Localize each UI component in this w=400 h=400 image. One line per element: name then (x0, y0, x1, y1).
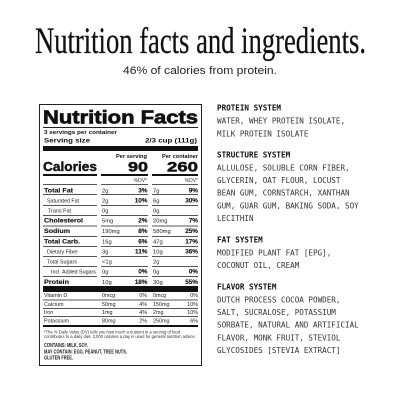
panel: nutrition facts label: %DV* (134, 178, 147, 184)
nutrient rows: 30g (153, 280, 163, 286)
nutrient rows: Total Fat (44, 188, 74, 194)
nutrient rows: 16g (102, 240, 112, 246)
nutrient rows: 7% (189, 218, 198, 224)
text block: flavor system: SALT, SUCRALOSE, POTASSIUM (217, 308, 336, 317)
text block: protein system: PROTEIN SYSTEM (217, 104, 281, 112)
nutrient rows: 6% (138, 238, 148, 246)
text block: structure system: GUM, GUAR GUM, BAKING SODA, SOY (217, 202, 359, 210)
nutrient rows: 20mg (153, 218, 168, 224)
vitamins and minerals: Calcium (44, 302, 64, 308)
vitamins and minerals: 2mg (153, 310, 164, 316)
footnote: contributes to a daily diet. 2,000 calories a day is used for general nutrition advice. (44, 334, 196, 339)
nutrient rows: Trans Fat (48, 208, 71, 214)
vitamins and minerals: 0mcg (153, 293, 166, 299)
text block: fat system: COCONUT OIL, CREAM (217, 261, 300, 270)
calories row: Calories (43, 160, 97, 174)
panel: nutrition facts label: %DV* (185, 178, 198, 184)
nutrient rows: 0% (189, 268, 198, 276)
vitamins and minerals: 4% (139, 310, 147, 316)
nutrient rows: 11% (135, 248, 148, 256)
text block: flavor system: GLYCOSIDES [STEVIA EXTRACT] (217, 346, 340, 355)
text block: flavor system: SORBATE, NATURAL AND ARTIFICIAL (217, 320, 359, 330)
nutrient rows: Sodium (44, 228, 70, 235)
nutrient rows: 190mg (102, 229, 120, 235)
nutrition facts heading: Nutrition Facts (43, 106, 198, 128)
nutrient rows: 36% (185, 248, 198, 256)
vitamins and minerals: 150mg (153, 302, 169, 308)
nutrient rows: 10% (135, 198, 148, 204)
vitamins and minerals: Iron (44, 310, 53, 316)
text block: fat system (217, 236, 331, 270)
nutrient rows: 2g (102, 198, 108, 204)
nutrient rows: 2g (153, 260, 159, 266)
serving size: 2/3 cup (111g) (145, 138, 197, 144)
vitamins and minerals: 1mg (102, 310, 112, 316)
servings: 3 servings per container (44, 130, 118, 136)
nutrient rows: 17% (185, 238, 198, 246)
text block: flavor system: FLAVOR, MONK FRUIT, STEVIOL (217, 334, 341, 342)
text block: protein system: WATER, WHEY PROTEIN ISOLATE, (217, 116, 345, 126)
panel: nutrition facts label (40, 104, 202, 366)
nutrient rows: 0% (138, 268, 148, 276)
vitamins and minerals (44, 293, 198, 324)
allergens (44, 343, 127, 362)
vitamins and minerals: 250mg (153, 318, 169, 324)
allergens: CONTAINS: MILK, SOY. (44, 343, 88, 349)
vitamins and minerals: Potassium (44, 318, 70, 324)
nutrient rows: 3% (138, 188, 148, 194)
vitamins and minerals: Vitamin D (44, 293, 67, 299)
serving size (44, 138, 197, 144)
nutrient rows: 25% (185, 228, 198, 235)
nutrient rows: 0g (102, 270, 108, 276)
allergens: MAY CONTAIN: EGG, PEANUT, TREE NUTS. (44, 350, 127, 356)
vitamins and minerals: 50mg (102, 302, 116, 308)
vitamins and minerals: 10% (187, 310, 198, 316)
text block: structure system: BEAN GUM, CORNSTARCH, XANTHAN (217, 188, 350, 198)
vitamins and minerals: 10% (187, 302, 198, 308)
nutrient rows: <1g (102, 260, 112, 266)
footnote: *The % Daily Value (DV) tells you how much a nutrient in a serving of food (44, 330, 181, 334)
vitamins and minerals: 0% (190, 293, 198, 299)
nutrient rows: 30% (185, 198, 198, 204)
nutrient rows: 5mg (102, 218, 113, 224)
text block: fat system: FAT SYSTEM (217, 236, 263, 244)
text block: structure system: ALLULOSE, SOLUBLE CORN FIBER, (217, 164, 350, 172)
nutrient rows: 9% (189, 188, 198, 194)
text block: protein system: MILK PROTEIN ISOLATE (217, 130, 309, 138)
nutrient rows: Total Carb. (44, 238, 80, 246)
nutrient rows: 3g (102, 250, 108, 256)
nutrient rows: Incl. Added Sugars (51, 270, 96, 276)
nutrient rows: 55% (185, 279, 198, 286)
text block: fat system: MODIFIED PLANT FAT [EPG], (217, 248, 331, 258)
nutrient rows: 10g (153, 250, 163, 256)
text block: structure system: LECITHIN (217, 214, 254, 223)
nutrient rows: 2% (138, 218, 148, 224)
nutrient rows: 0g (153, 208, 159, 214)
calories row (43, 154, 199, 174)
nutrient rows: 47g (153, 240, 163, 246)
text block: structure system: GLYCERIN, OAT FLOUR, LOCUST (217, 176, 341, 185)
nutrient rows: 7g (153, 188, 159, 194)
nutrient rows: 2g (102, 188, 108, 194)
nutrient rows (44, 188, 198, 286)
nutrient rows: Saturated Fat (47, 198, 79, 204)
text block: structure system (217, 150, 359, 223)
text block: flavor system: FLAVOR SYSTEM (217, 282, 277, 292)
calories row: Per container (162, 154, 199, 160)
calories row: 260 (167, 160, 198, 174)
text block: flavor system: DUTCH PROCESS COCOA POWDER, (217, 296, 340, 304)
nutrient rows: 6g (153, 198, 159, 204)
vitamins and minerals: 0% (139, 293, 147, 299)
vitamins and minerals: 0mcg (102, 293, 115, 299)
allergens: GLUTEN FREE. (44, 356, 73, 362)
nutrient rows: 8% (138, 228, 148, 235)
nutrient rows: Total Sugars (47, 260, 77, 266)
nutrient rows: 10g (102, 280, 112, 286)
vitamins and minerals: 4% (139, 302, 147, 308)
nutrient rows: Cholesterol (44, 218, 83, 224)
vitamins and minerals: 2% (139, 318, 147, 324)
subtitle: 46% of calories from protein. (123, 65, 277, 77)
nutrient rows: 0g (102, 208, 108, 214)
nutrient rows: Protein (44, 279, 69, 286)
text block: protein system (217, 104, 345, 138)
nutrient rows: Dietary Fiber (47, 250, 78, 256)
serving size: Serving size (44, 138, 91, 144)
calories row: Per serving (116, 154, 147, 160)
text block: flavor system (217, 282, 359, 355)
text block: structure system: STRUCTURE SYSTEM (217, 150, 291, 160)
calories row: 90 (128, 160, 148, 174)
nutrient rows: 0g (153, 270, 159, 276)
nutrient rows: 580mg (153, 229, 171, 235)
vitamins and minerals: 80mg (102, 318, 116, 324)
footnote (44, 330, 196, 339)
vitamins and minerals: 6% (190, 318, 198, 324)
nutrient rows: 18% (135, 279, 148, 286)
